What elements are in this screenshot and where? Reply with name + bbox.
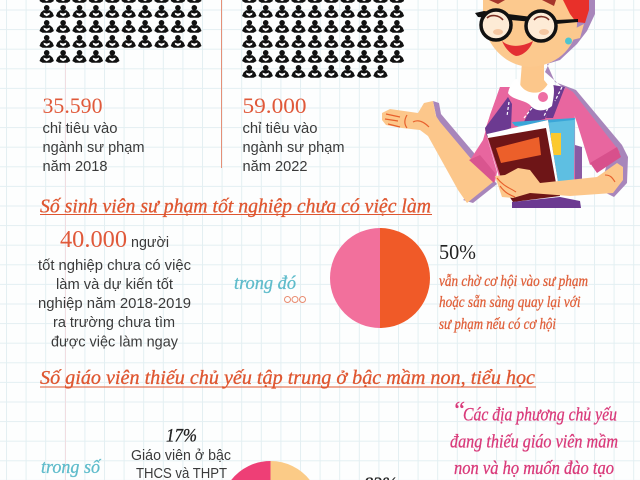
stat 2022: năm 2022 <box>242 158 308 175</box>
teacher illustration <box>382 0 628 208</box>
text block: 40.000 graduates <box>38 227 191 350</box>
left arm <box>382 101 493 203</box>
hair <box>563 0 589 23</box>
quote: đang thiếu giáo viên mầm <box>450 432 618 452</box>
vest: centre panel <box>523 107 550 124</box>
callout: 50%: 50% <box>439 240 476 264</box>
callout: 50%: sư phạm nếu có cơ hội <box>439 316 556 333</box>
quote: Các địa phương chủ yếu <box>463 406 617 426</box>
callout: 50% <box>439 240 588 333</box>
stat 2018: 35.590 <box>42 93 102 118</box>
text block: 40.000 graduates: 40.000 <box>60 227 127 253</box>
skirt <box>512 197 581 208</box>
flower brooch <box>538 92 548 102</box>
stat: 17%: Giáo viên ở bậc <box>131 447 231 464</box>
ear and earring <box>572 24 584 40</box>
pie chart: 50% <box>330 228 430 328</box>
collar <box>508 79 554 110</box>
stat 2018 <box>42 93 144 175</box>
label: trong do with dots: trong đó <box>234 273 296 294</box>
text block: 40.000 graduates: được việc làm ngay <box>51 334 178 350</box>
stat 2022: ngành sư phạm <box>242 139 344 156</box>
heading: unemployed graduates: Số sinh viên sư phạm tốt nghiệp chưa có việc làm <box>40 196 431 218</box>
purple shadow: left arm <box>433 101 478 162</box>
stat: 17% <box>131 426 231 480</box>
face <box>483 0 577 67</box>
mouth <box>502 41 533 56</box>
neck <box>520 62 552 100</box>
stat 2022: 59.000 <box>242 93 306 118</box>
left sleeve <box>470 87 510 182</box>
purple shadow: left elbow <box>463 178 497 203</box>
left cuff <box>469 155 495 183</box>
stat 2022 <box>242 93 344 175</box>
text block: 40.000 graduates: tốt nghiệp chưa có việc <box>38 257 191 274</box>
callout: 50%: hoặc sẵn sàng quay lại với <box>439 294 580 311</box>
callout: 50%: vẫn chờ cơ hội vào sư phạm <box>439 273 588 290</box>
stat 2018: chỉ tiêu vào <box>42 120 118 137</box>
text block: 40.000 graduates: làm và dự kiến tốt <box>56 276 174 293</box>
red book <box>487 120 560 202</box>
vest: right strap <box>546 85 565 118</box>
text block: 40.000 graduates: người <box>131 234 169 251</box>
right cuff <box>590 147 621 173</box>
right forearm and hand <box>495 163 623 198</box>
text block: 40.000 graduates: nghiệp năm 2018-2019 <box>38 295 191 312</box>
stat 2018: năm 2018 <box>42 158 108 175</box>
vest: left strap <box>485 97 512 137</box>
icon grid: 59.000 students 2022 <box>242 0 404 78</box>
quote <box>450 398 618 479</box>
torso side panel <box>575 145 582 180</box>
icon grid: 35.590 students 2018 <box>40 0 202 63</box>
stat 2022: chỉ tiêu vào <box>242 120 318 137</box>
sweater torso <box>485 85 575 180</box>
purple shadow: head, neck and right arm <box>545 0 628 197</box>
heading: teacher shortage: Số giáo viên thiếu chủ yếu tập trung ở bậc mầm non, tiểu học <box>40 367 535 389</box>
stat: 17%: 17% <box>166 426 197 446</box>
text block: 40.000 graduates: ra trường chưa tìm <box>53 314 175 331</box>
pie chart: teacher levels <box>231 461 310 480</box>
stat 2018: ngành sư phạm <box>42 139 144 156</box>
blue book <box>512 118 575 182</box>
glasses <box>475 11 578 24</box>
quote: “ <box>452 398 465 424</box>
quote: non và họ muốn đào tạo <box>454 459 614 479</box>
eyebrows <box>489 0 556 6</box>
book label <box>496 137 541 163</box>
right sleeve <box>565 87 620 165</box>
label: trong so: trong số <box>41 457 101 478</box>
label: trong do with dots <box>234 273 306 302</box>
